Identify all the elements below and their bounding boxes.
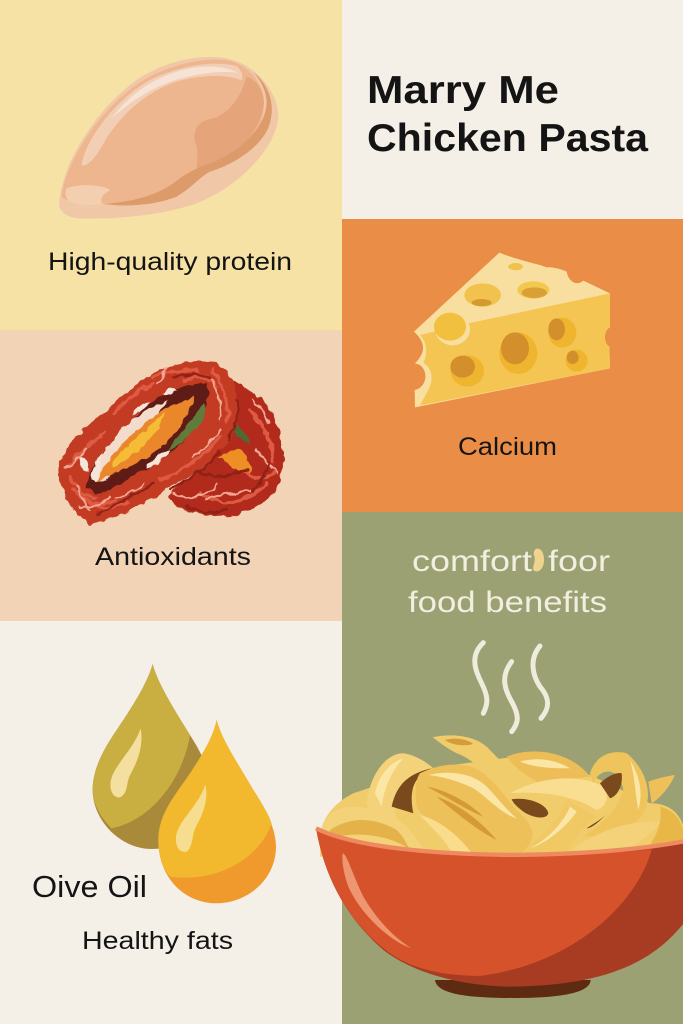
heading: comfort food benefits: food benefits [408,586,607,619]
panel: antioxidants [0,330,342,621]
bowl [316,828,683,998]
icon: chicken breast [59,57,278,219]
heading: Marry Me [367,69,559,112]
heading: comfort food benefits: foor [548,545,610,578]
panel: high-quality protein [0,0,342,330]
icon: cheese wedge [414,253,610,407]
icon: bean [533,549,544,571]
icon: sun-dried tomatoes [58,361,283,524]
heading [367,69,648,160]
icon: steam [475,643,548,732]
panel: calcium [342,219,683,512]
label: high-quality protein: High-quality protein [48,248,292,276]
illustration: bowl of pasta [316,735,683,998]
heading: comfort food benefits [408,545,610,619]
panel: healthy fats [0,621,342,1024]
icon: olive oil drops [93,664,276,903]
heading: Chicken Pasta [367,117,648,160]
panel: comfort food benefits [342,512,683,1024]
label: calcium: Calcium [458,433,557,461]
label: olive oil: Oive Oil [32,869,147,904]
heading: comfort food benefits: comfort [412,545,533,578]
label: antioxidants: Antioxidants [95,543,251,571]
pasta [320,735,683,857]
label: healthy fats: Healthy fats [82,927,233,955]
panel: title [342,0,683,219]
